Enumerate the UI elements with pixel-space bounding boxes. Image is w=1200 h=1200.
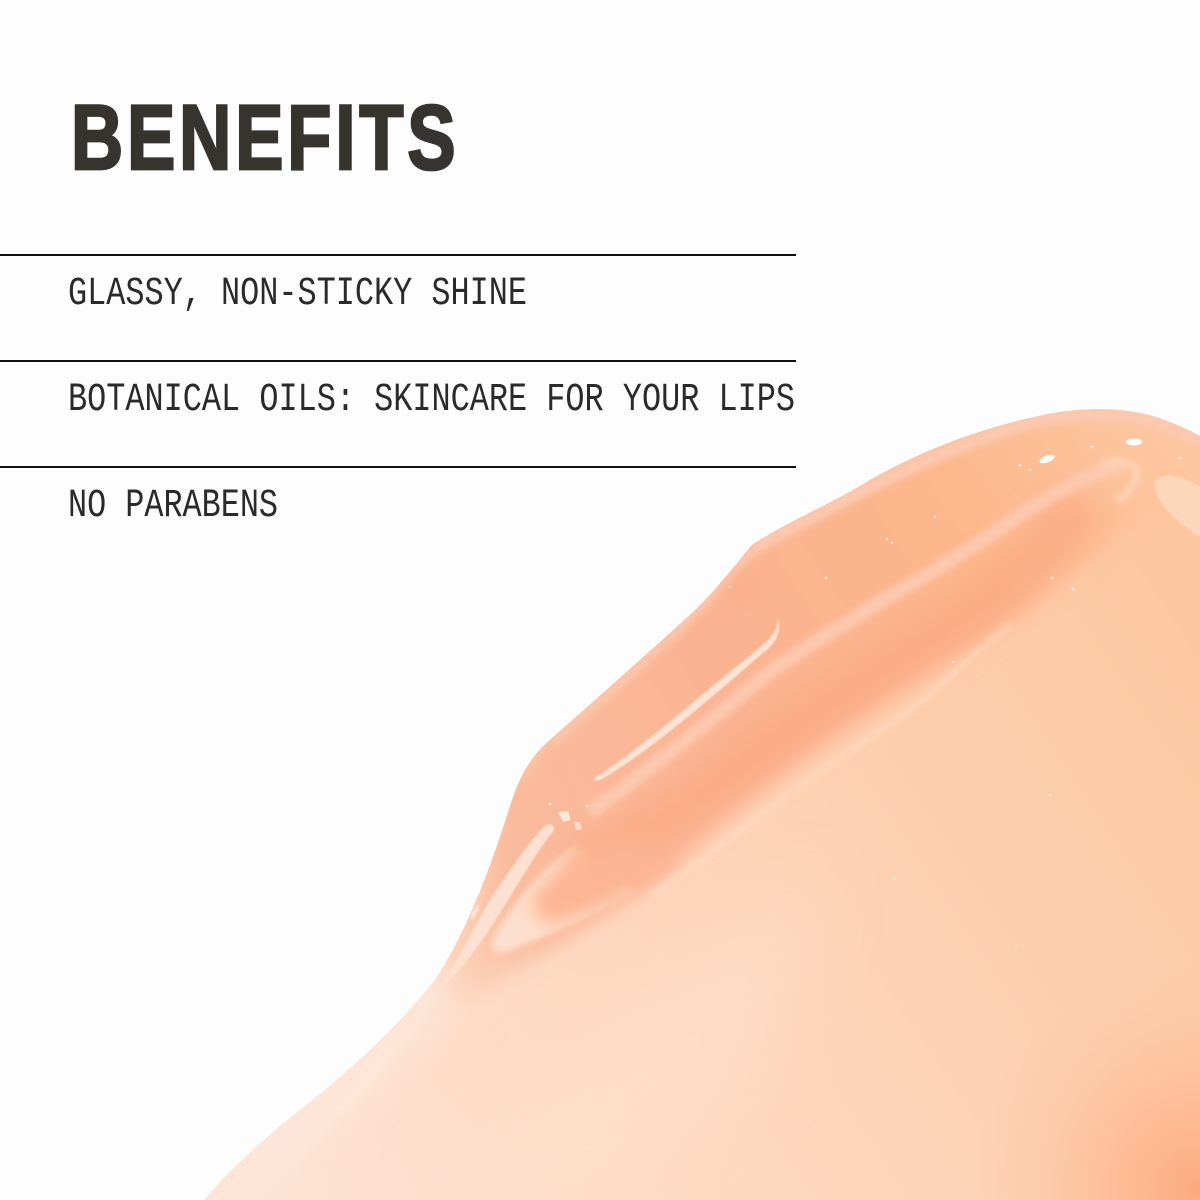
divider rule 2 xyxy=(0,360,796,362)
divider rule 3 xyxy=(0,466,796,468)
pale tear-drop inside tip xyxy=(493,845,635,953)
long thin streak xyxy=(593,618,779,780)
small streak xyxy=(471,904,479,920)
soft boundary line under ridge xyxy=(650,625,1010,895)
pale lower body wash xyxy=(671,941,778,1066)
upper gloss band xyxy=(439,409,1200,994)
bottom right warm corner xyxy=(1027,1043,1200,1200)
benefit 2: BOTANICAL OILS: SKINCARE FOR YOUR LIPS xyxy=(68,378,795,423)
inner ridge highlight xyxy=(590,466,1122,812)
title: BENEFITS xyxy=(71,86,459,189)
sparkles xyxy=(549,446,1181,946)
lighter rim along the edge xyxy=(752,414,1200,548)
right side pale streak xyxy=(1155,476,1200,540)
benefit 1: GLASSY, NON-STICKY SHINE xyxy=(68,272,527,317)
lip gloss swatch xyxy=(200,400,1200,1200)
small diamond glints xyxy=(558,811,571,822)
white glints xyxy=(1038,453,1056,465)
gloss highlight streaks xyxy=(440,438,1181,988)
benefit 3: NO PARABENS xyxy=(68,484,278,529)
tip streak xyxy=(440,824,554,988)
pale lower-left edge glow xyxy=(305,970,459,1120)
ridge end pale hook xyxy=(1100,461,1137,500)
darker ridge shading xyxy=(570,505,1085,870)
crease shadow upper xyxy=(718,564,772,616)
swatch base colour xyxy=(200,400,1200,1200)
lower left faint streak xyxy=(340,1045,392,1110)
divider rule 1 xyxy=(0,254,796,256)
ridge tip shading xyxy=(530,835,680,925)
